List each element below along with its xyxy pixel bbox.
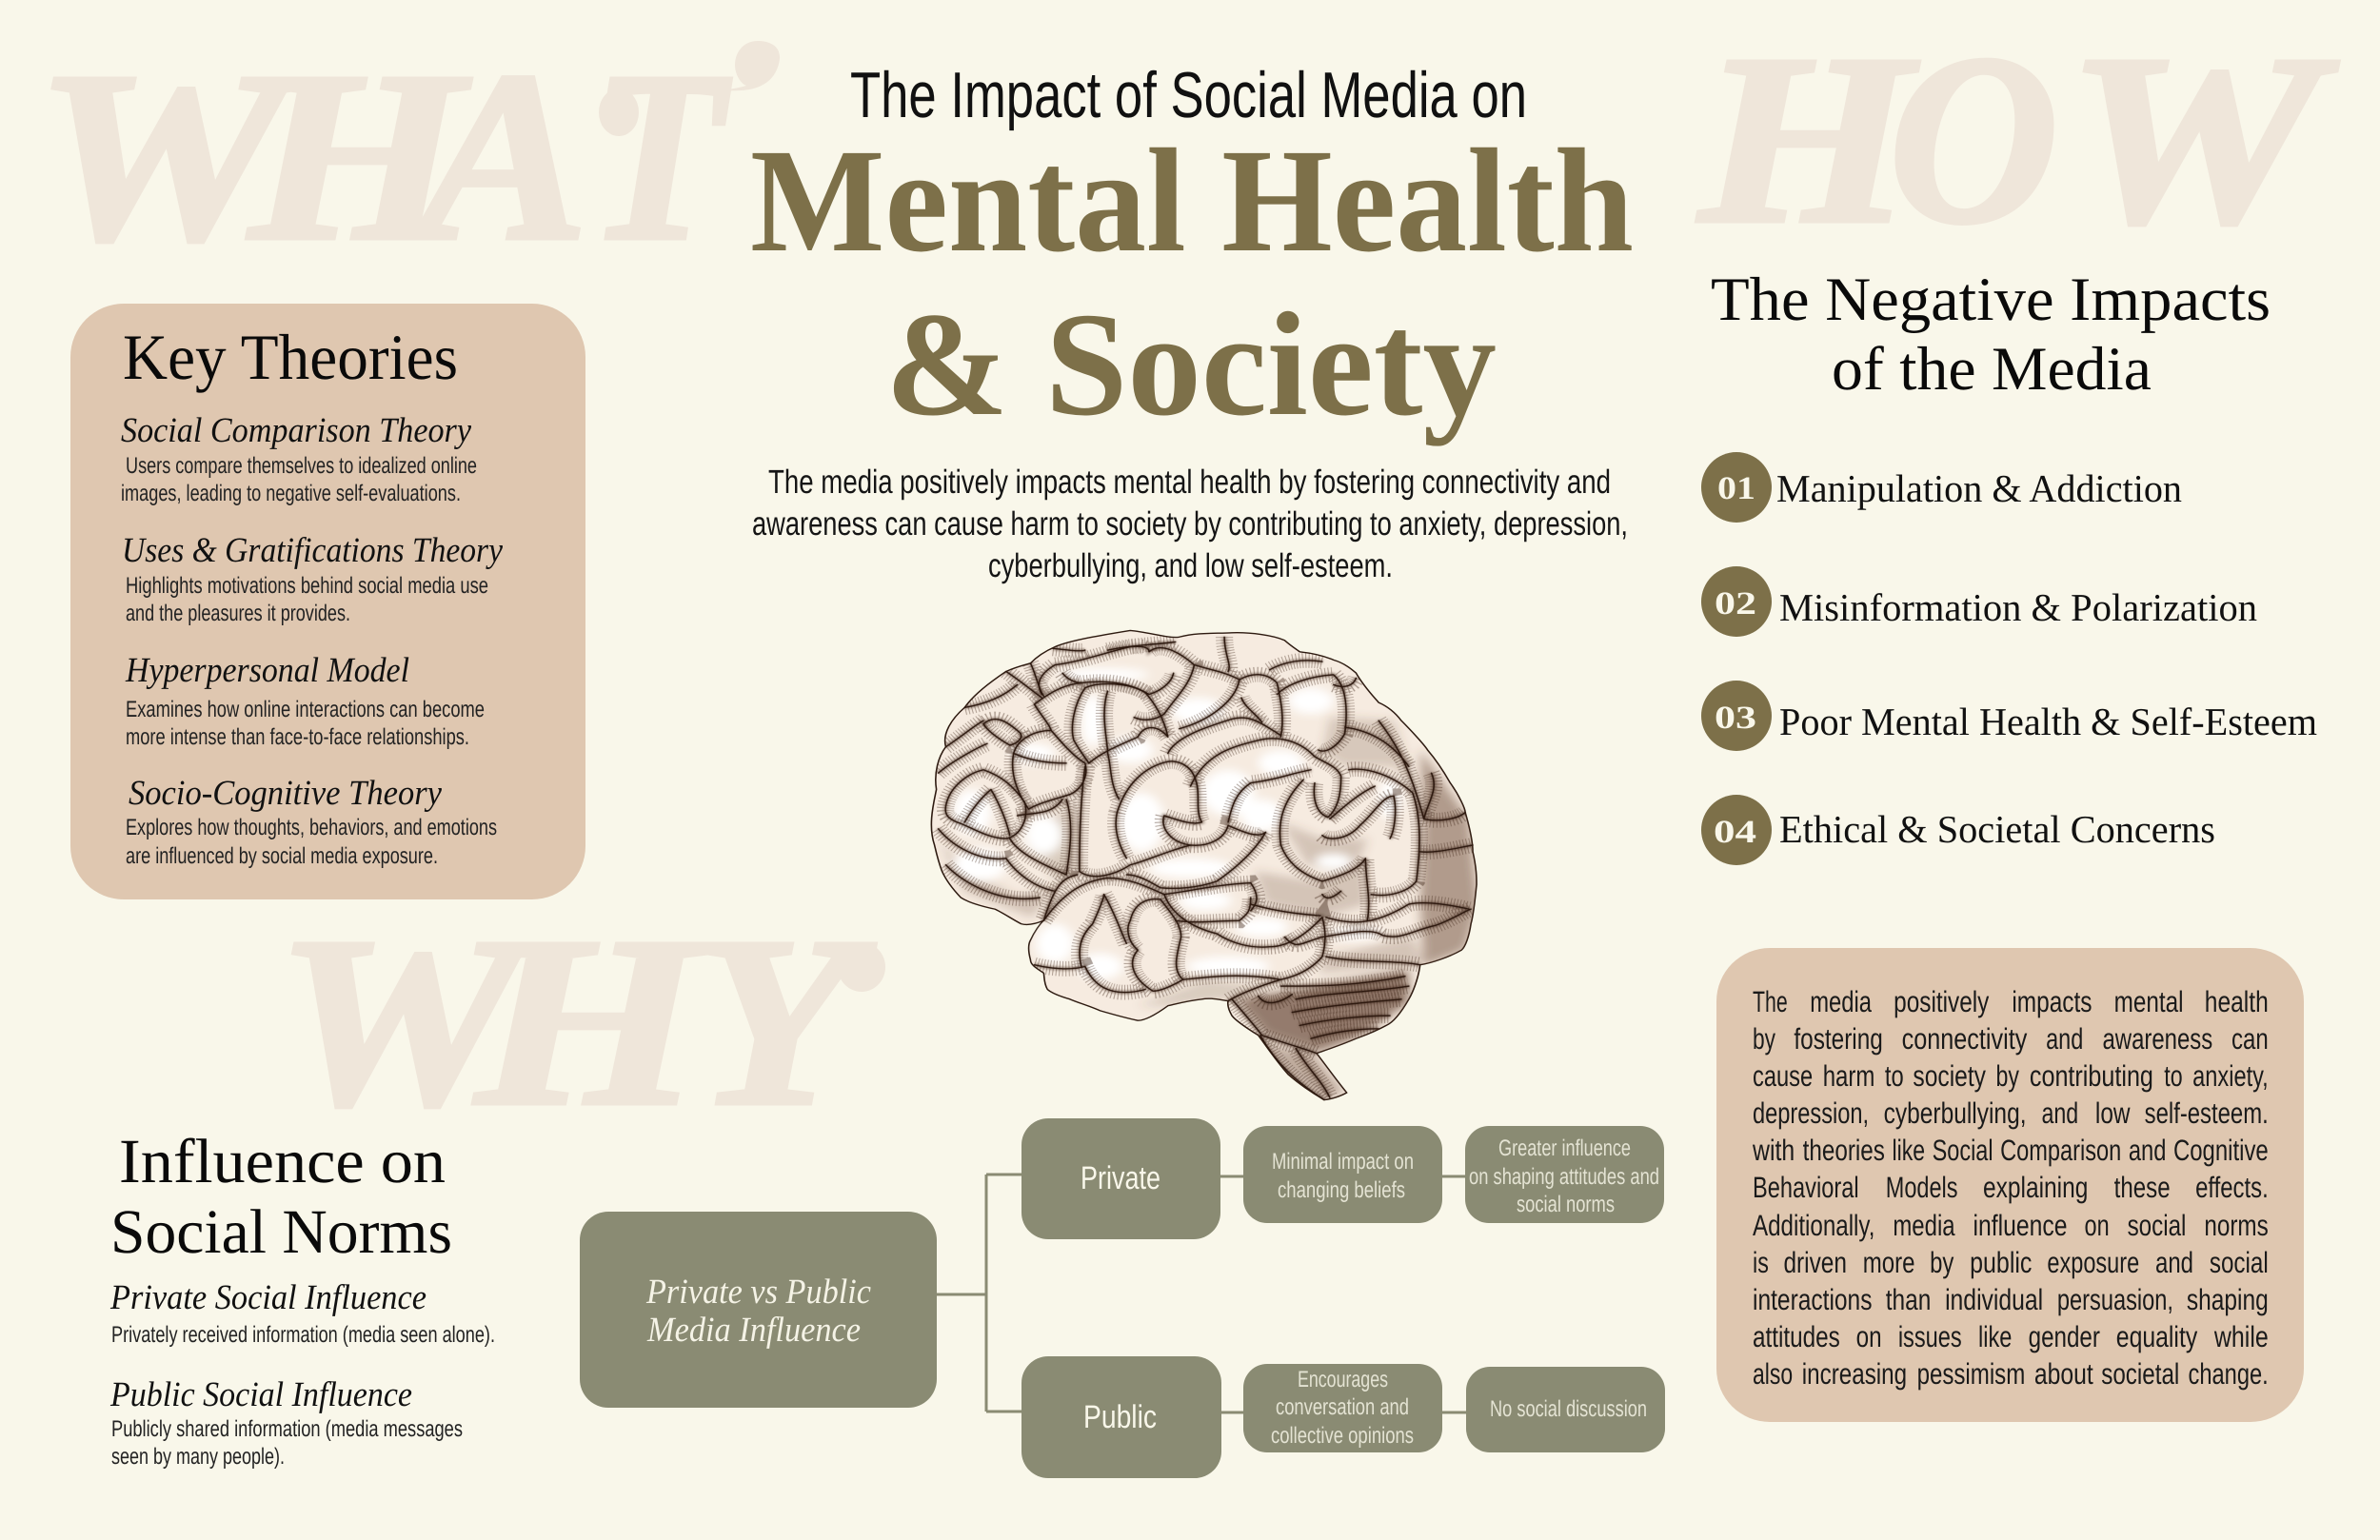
summary text: theories xyxy=(1803,1134,1885,1167)
node: root: Private vs Public xyxy=(645,1273,872,1312)
theory: Hyperpersonal Model: Examines how online interactions can become xyxy=(126,697,485,722)
theory: Uses and Gratifications: and the pleasures it provides. xyxy=(126,601,350,626)
heading: influence on social norms xyxy=(110,1127,452,1267)
theory: Hyperpersonal Model: Hyperpersonal Model xyxy=(125,651,409,690)
summary text: persuasion, xyxy=(2057,1283,2173,1316)
connectors xyxy=(937,1175,1466,1412)
text: public social influence xyxy=(109,1375,463,1470)
summary text: pessimism xyxy=(1917,1357,2025,1391)
summary text: by xyxy=(1930,1246,1954,1279)
summary text: media xyxy=(1893,1209,1955,1242)
summary text: Cognitive xyxy=(2173,1134,2269,1167)
intro paragraph: cyberbullying, and low self-esteem. xyxy=(988,547,1393,584)
watermark: WHY: W xyxy=(275,888,537,1156)
theory: Social Comparison: images, leading to negative self-evaluations. xyxy=(121,481,461,506)
intro paragraph: The media positively impacts mental health by fostering connectivity and xyxy=(768,464,1611,501)
tone: highlights xyxy=(953,668,1401,979)
text: public social influence: Public Social Influence xyxy=(109,1375,412,1414)
node: minimal impact: Minimal impact on xyxy=(1272,1149,1414,1175)
node: minimal impact xyxy=(1243,1126,1442,1223)
watermark: WHAT xyxy=(34,23,780,291)
tone: soft shading xyxy=(939,718,1478,1099)
panel: negative impacts xyxy=(1701,266,2317,865)
summary text: Behavioral xyxy=(1753,1171,1859,1204)
summary text: and xyxy=(2041,1096,2078,1130)
summary text: also xyxy=(1753,1357,1793,1391)
intro paragraph xyxy=(752,464,1628,584)
summary text: on xyxy=(2085,1209,2110,1242)
theory: Socio-Cognitive: are influenced by social media exposure. xyxy=(126,843,438,869)
node: encourages: Encourages xyxy=(1298,1367,1388,1392)
node: greater influence: social norms xyxy=(1517,1192,1615,1217)
node: root: Media Influence xyxy=(646,1311,861,1350)
title: Mental Health: Mental Health xyxy=(750,118,1634,283)
item 01: Manipulation & Addiction xyxy=(1776,466,2182,510)
theory: Uses and Gratifications: Uses & Gratifications Theory xyxy=(122,531,504,570)
item 04: Ethical & Societal Concerns xyxy=(1779,807,2215,851)
summary text: to xyxy=(1885,1059,1904,1093)
summary text: interactions xyxy=(1753,1283,1872,1316)
summary text: about xyxy=(2034,1357,2093,1391)
summary text: contributing xyxy=(2030,1059,2153,1093)
summary text: cause xyxy=(1753,1059,1813,1093)
summary text: is xyxy=(1753,1246,1769,1279)
summary text: more xyxy=(1863,1246,1914,1279)
text: public social influence: Publicly shared information (media messages xyxy=(111,1416,463,1442)
node: greater influence: Greater influence xyxy=(1498,1135,1631,1161)
theory: Hyperpersonal Model: more intense than face-to-face relationships. xyxy=(126,724,469,750)
summary text: self-esteem. xyxy=(2145,1096,2269,1130)
item 03 xyxy=(1701,681,2317,751)
heading: negative impacts: of the Media xyxy=(1832,335,2152,404)
node: encourages: collective opinions xyxy=(1271,1423,1414,1449)
summary text: gender xyxy=(2029,1320,2100,1353)
summary text: with xyxy=(1752,1134,1795,1167)
summary text: social xyxy=(2128,1209,2186,1242)
summary text: by xyxy=(1753,1022,1775,1056)
summary text: these xyxy=(2114,1171,2171,1204)
summary text: like xyxy=(1893,1134,1925,1167)
summary text: driven xyxy=(1783,1246,1847,1279)
summary text: cyberbullying, xyxy=(1884,1096,2027,1130)
text: private social influence xyxy=(109,1278,495,1348)
summary text: by xyxy=(1996,1059,2019,1093)
node: minimal impact: changing beliefs xyxy=(1278,1177,1405,1203)
theory: Social Comparison: Users compare themselves to idealized online xyxy=(126,453,477,479)
illustration: engraved brain xyxy=(931,630,1478,1100)
watermark: WHAT: T xyxy=(588,23,731,291)
summary text: explaining xyxy=(1983,1171,2088,1204)
text: public social influence: seen by many people). xyxy=(111,1444,285,1470)
summary text: while xyxy=(2213,1320,2269,1353)
summary text: mental xyxy=(2114,985,2183,1018)
summary text: than xyxy=(1886,1283,1931,1316)
heading: Key Theories: Key Theories xyxy=(123,321,458,393)
summary text: Models xyxy=(1886,1171,1958,1204)
theory: Social Comparison xyxy=(121,411,477,506)
summary text: harm xyxy=(1823,1059,1874,1093)
summary text: awareness xyxy=(2102,1022,2212,1056)
item 01: 01 xyxy=(1717,471,1755,506)
summary text: influence xyxy=(1973,1209,2067,1242)
summary text: The xyxy=(1753,985,1788,1018)
summary text: shaping xyxy=(2187,1283,2269,1316)
watermark: WHY: H xyxy=(474,888,708,1156)
summary text: Additionally, xyxy=(1753,1209,1874,1242)
node: encourages xyxy=(1243,1364,1442,1452)
watermark: HOW: H xyxy=(1697,6,1918,274)
theory: Socio-Cognitive: Socio-Cognitive Theory xyxy=(129,774,443,813)
theory: Uses and Gratifications xyxy=(122,531,504,626)
item 02: 02 xyxy=(1715,586,1756,622)
panel: influence on social norms xyxy=(109,1127,495,1470)
summary text: and xyxy=(2046,1022,2083,1056)
summary text: health xyxy=(2205,985,2269,1018)
node: no social discussion xyxy=(1466,1367,1665,1452)
heading: negative impacts xyxy=(1711,266,2271,404)
engraved hatch along folds xyxy=(939,637,1473,1100)
summary text: on xyxy=(1856,1320,1882,1353)
summary text: exposure xyxy=(2047,1246,2139,1279)
watermark: WHY xyxy=(275,888,885,1156)
title: & Society: & Society xyxy=(885,282,1497,446)
summary text: Social xyxy=(1933,1134,1993,1167)
summary text xyxy=(1752,985,2269,1391)
summary text: depression, xyxy=(1753,1096,1869,1130)
text: private social influence: Privately received information (media seen alone). xyxy=(111,1322,495,1348)
soft fold shadow xyxy=(939,637,1473,1100)
summary text: connectivity xyxy=(1902,1022,2028,1056)
intro paragraph: awareness can cause harm to society by contributing to anxiety, depression, xyxy=(752,505,1628,543)
watermark: HOW xyxy=(1697,6,2338,274)
panel: summary xyxy=(1716,948,2304,1422)
watermark: HOW: O xyxy=(1889,6,2058,274)
item 02: Misinformation & Polarization xyxy=(1779,585,2257,629)
node: private xyxy=(1021,1118,1220,1239)
node: greater influence: on shaping attitudes and xyxy=(1469,1164,1659,1190)
title: subtitle line: The Impact of Social Media on xyxy=(850,59,1527,131)
summary text: Comparison xyxy=(2000,1134,2121,1167)
summary text: and xyxy=(2155,1246,2193,1279)
flowchart: private vs public xyxy=(580,1118,1665,1478)
summary text: change. xyxy=(2189,1357,2269,1391)
fold ink lines xyxy=(939,637,1473,1100)
summary text: social xyxy=(2210,1246,2269,1279)
theory: Hyperpersonal Model xyxy=(125,651,485,750)
item 03: 03 xyxy=(1715,701,1756,736)
summary text: societal xyxy=(2101,1357,2179,1391)
item 01 xyxy=(1701,452,2182,523)
item 04 xyxy=(1701,795,2215,865)
summary text: impacts xyxy=(2012,985,2092,1018)
theory: Socio-Cognitive xyxy=(126,774,497,869)
node: private: Private xyxy=(1081,1160,1160,1196)
summary text: increasing xyxy=(1802,1357,1907,1391)
panel: key theories xyxy=(70,304,585,899)
item 04: 04 xyxy=(1714,815,1756,850)
watermark: WHAT: A xyxy=(405,23,588,291)
summary text: to xyxy=(2164,1059,2183,1093)
summary text: and xyxy=(2129,1134,2166,1167)
node: public: Public xyxy=(1083,1399,1157,1435)
item 02 xyxy=(1701,566,2257,637)
node: encourages: conversation and xyxy=(1276,1394,1409,1420)
item 03: Poor Mental Health & Self-Esteem xyxy=(1779,700,2317,743)
summary text: like xyxy=(1978,1320,2012,1353)
summary text: positively xyxy=(1894,985,1990,1018)
summary text: public xyxy=(1970,1246,2032,1279)
summary text: media xyxy=(1810,985,1873,1018)
summary text: can xyxy=(2231,1022,2269,1056)
watermark: WHY: Y xyxy=(695,888,876,1156)
title xyxy=(750,59,1634,446)
summary text: low xyxy=(2095,1096,2131,1130)
watermark: WHAT: W xyxy=(34,23,304,291)
heading: influence on social norms: Social Norms xyxy=(110,1197,452,1267)
summary text: society xyxy=(1913,1059,1986,1093)
theory: Socio-Cognitive: Explores how thoughts, behaviors, and emotions xyxy=(126,815,497,840)
text: private social influence: Private Social Influence xyxy=(109,1278,426,1317)
summary text: equality xyxy=(2116,1320,2198,1353)
node: greater influence xyxy=(1465,1126,1664,1223)
summary text: attitudes xyxy=(1753,1320,1840,1353)
watermark: HOW: W xyxy=(2066,6,2338,274)
node: no social discussion: No social discussion xyxy=(1490,1396,1647,1422)
watermark: WHAT: H xyxy=(248,23,471,291)
summary text: effects. xyxy=(2195,1171,2269,1204)
summary text: anxiety, xyxy=(2192,1059,2269,1093)
heading: influence on social norms: Influence on xyxy=(119,1127,446,1196)
theory: Social Comparison: Social Comparison Theory xyxy=(121,411,472,450)
heading: negative impacts: The Negative Impacts xyxy=(1711,266,2271,334)
theory: Uses and Gratifications: Highlights motivations behind social media use xyxy=(126,573,488,599)
summary text: norms xyxy=(2204,1209,2269,1242)
node: public xyxy=(1021,1356,1221,1478)
summary text: issues xyxy=(1898,1320,1962,1353)
summary text: fostering xyxy=(1794,1022,1883,1056)
node: root xyxy=(580,1212,937,1408)
summary text: individual xyxy=(1945,1283,2043,1316)
